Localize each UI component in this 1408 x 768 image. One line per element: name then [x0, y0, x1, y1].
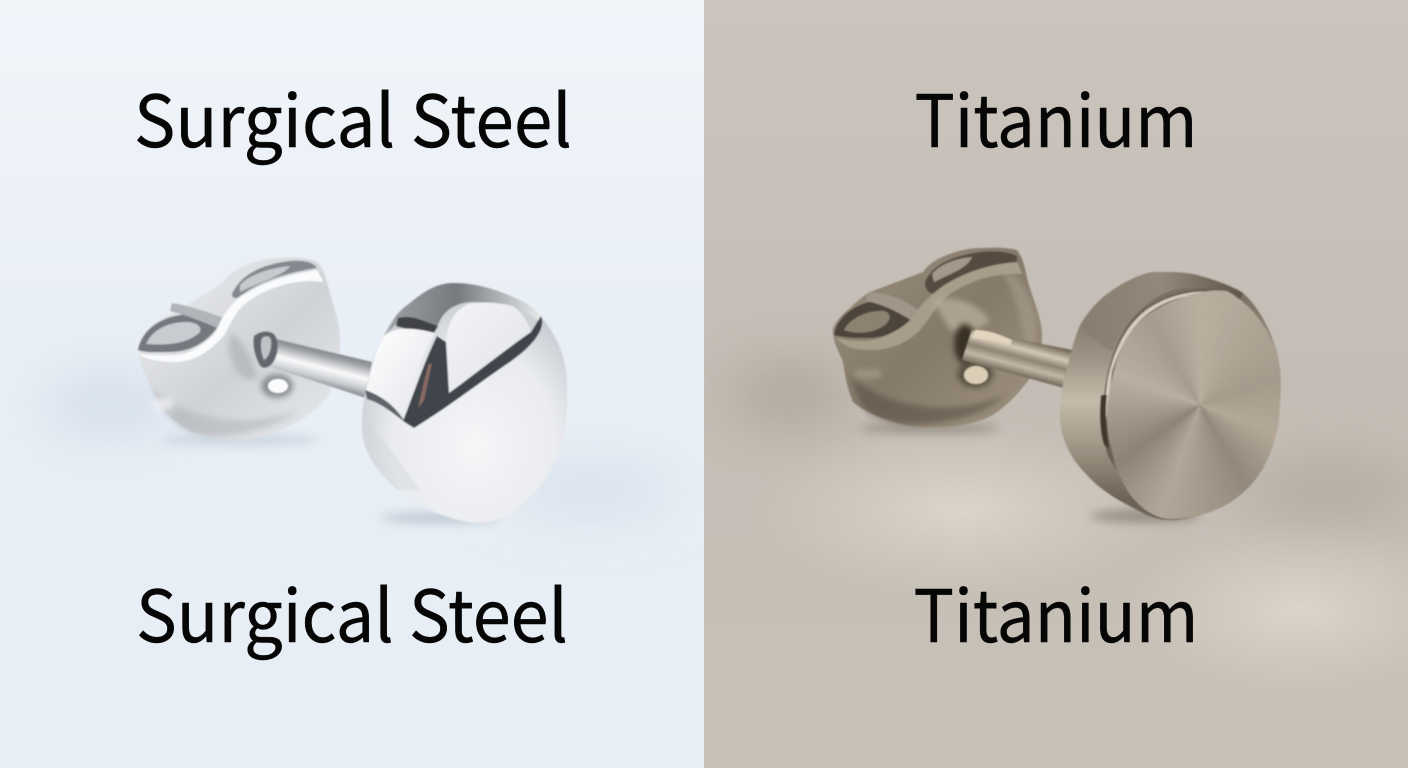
- panel: surgical steel: [0, 0, 704, 768]
- chamfer: [1103, 288, 1214, 468]
- titanium butterfly back: [833, 248, 1042, 427]
- icon: titanium earring stud: [833, 248, 1285, 525]
- steel disc: [355, 280, 567, 523]
- heading: surgical steel bottom: Surgical Steel: [136, 558, 568, 663]
- heading: titanium top: Titanium: [914, 63, 1198, 168]
- floor glow and shadows under titanium stud: [730, 369, 1408, 700]
- steel post: [253, 332, 372, 398]
- titanium disc edge: [1060, 272, 1281, 520]
- panel: titanium: [704, 0, 1408, 768]
- titanium disc face: [1100, 285, 1285, 525]
- soft shadows under steel stud: [40, 377, 680, 524]
- heading: titanium bottom: Titanium: [914, 558, 1198, 663]
- titanium post: [962, 330, 1072, 388]
- icon: steel earring stud: [138, 258, 567, 523]
- titanium disc: [1060, 272, 1285, 525]
- steel butterfly back: [138, 258, 340, 440]
- top rim: [1082, 272, 1243, 352]
- heading: surgical steel top: Surgical Steel: [134, 63, 572, 168]
